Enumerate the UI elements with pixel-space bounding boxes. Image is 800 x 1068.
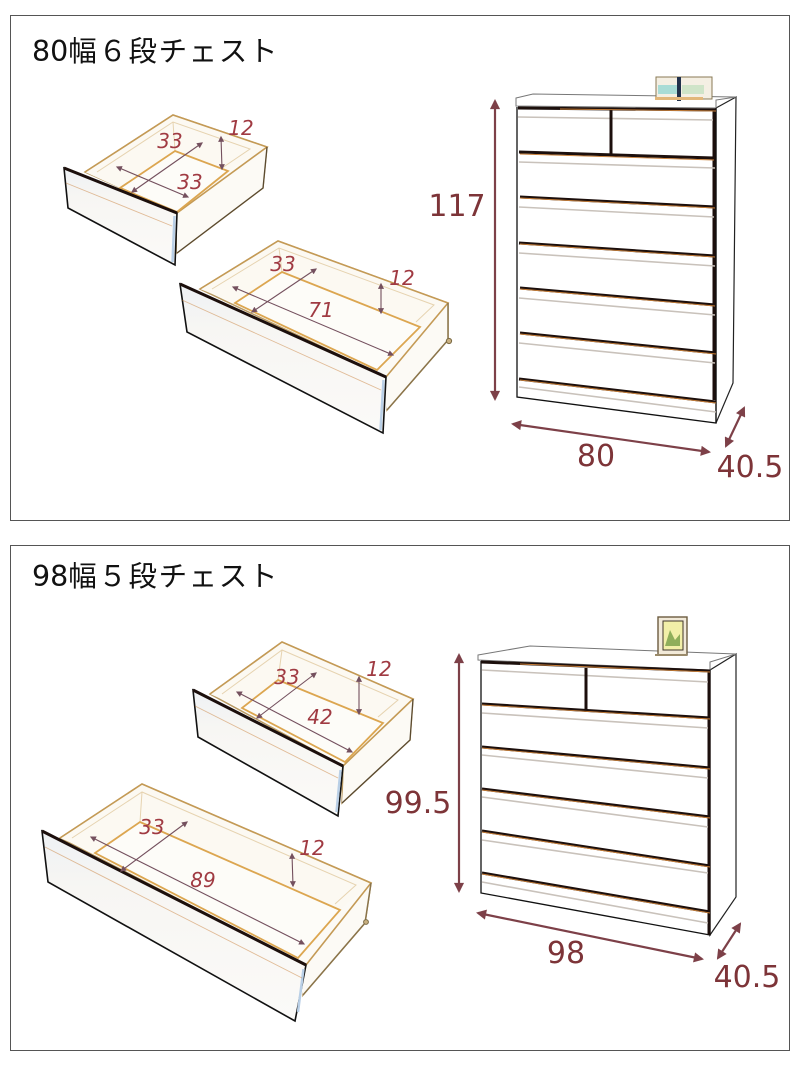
dimension arrow: depth 40.5 <box>717 408 783 485</box>
panel: 80 width six-drawer chest <box>10 16 790 520</box>
dimension arrow: height 99.5: 99.5 <box>385 786 451 821</box>
drawer: small drawer 33 x 42 x 12 <box>193 642 413 816</box>
drawer: small drawer 33 x 33 x 12: 33 <box>157 129 183 153</box>
icon: decorative box on top <box>655 77 712 101</box>
dimension arrow: width 80: 80 <box>577 439 615 474</box>
drawer: long drawer 33 x 89 x 12 <box>42 784 371 1021</box>
dimension arrow: width 98: 98 <box>547 936 585 971</box>
icon: picture frame on top <box>655 617 687 656</box>
dimension arrow: height 117: 117 <box>428 189 486 224</box>
drawer: long drawer 33 x 89 x 12: 12 <box>299 836 325 860</box>
drawer: small drawer 33 x 33 x 12: 33 <box>177 170 203 194</box>
drawer: small drawer 33 x 42 x 12: 42 <box>307 705 333 729</box>
drawer: long drawer 33 x 71 x 12: 33 <box>270 252 296 276</box>
dimension arrow: depth 40.5: 40.5 <box>717 450 783 485</box>
drawer: small drawer 33 x 33 x 12 <box>64 115 267 265</box>
drawer: small drawer 33 x 42 x 12: 33 <box>274 665 300 689</box>
panel: 98 width five-drawer chest <box>10 546 790 1050</box>
dimension arrow: depth 40.5: 40.5 <box>714 960 780 995</box>
drawer: long drawer 33 x 89 x 12: 89 <box>190 868 216 892</box>
dimension arrow: width 98 <box>478 913 702 971</box>
drawer: long drawer 33 x 89 x 12: 33 <box>139 815 165 839</box>
drawer: small drawer 33 x 42 x 12: 12 <box>366 657 392 681</box>
drawer: small drawer 33 x 33 x 12: 12 <box>228 116 254 140</box>
chest: six-drawer chest illustration <box>516 77 736 423</box>
drawer: long drawer 33 x 71 x 12: 12 <box>389 266 415 290</box>
title: 80幅6段チェスト: 80幅６段チェスト <box>32 35 279 68</box>
drawer: long drawer 33 x 71 x 12 <box>180 241 452 433</box>
dimension arrow: depth 40.5 <box>714 924 780 995</box>
dimension arrow: width 80 <box>513 424 709 474</box>
drawer: long drawer 33 x 71 x 12: 71 <box>308 298 334 322</box>
chest: five-drawer chest illustration <box>478 617 736 935</box>
title: 98幅5段チェスト: 98幅５段チェスト <box>32 560 279 593</box>
